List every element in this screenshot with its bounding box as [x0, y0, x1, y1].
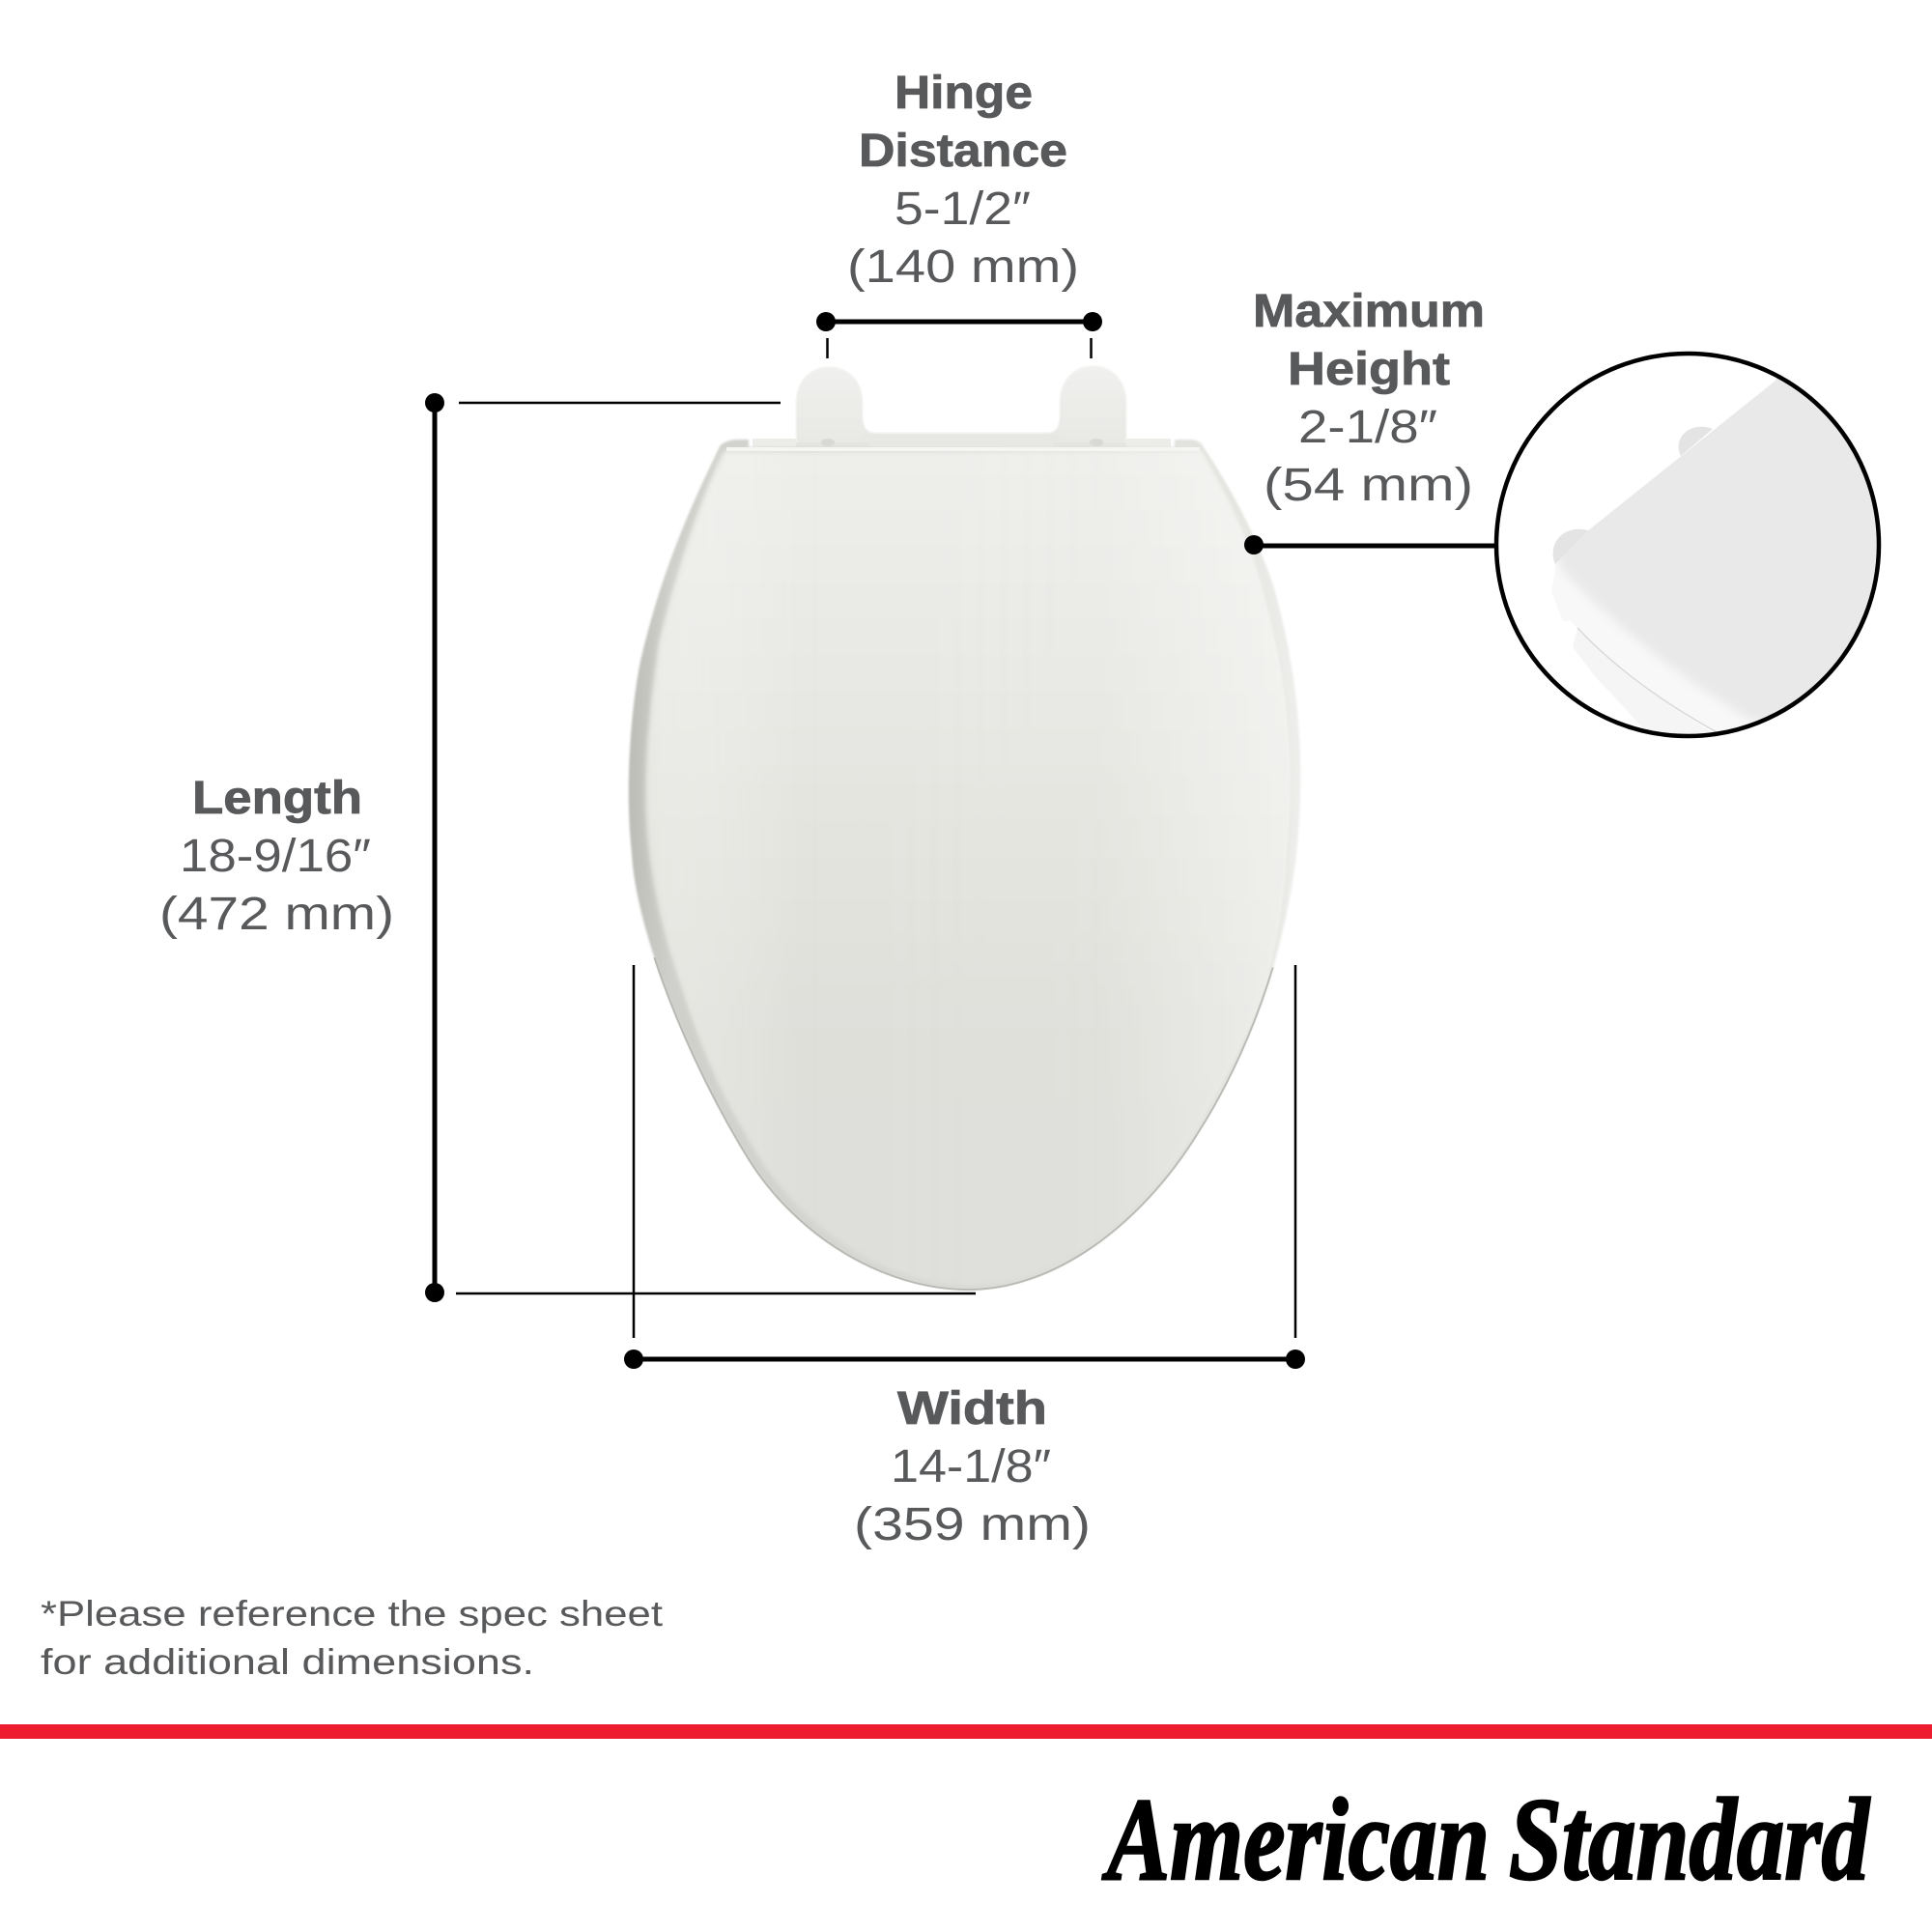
inset: side profile circle — [1493, 352, 1882, 738]
label: Length: (472 mm) — [159, 889, 394, 940]
seat rim — [629, 440, 1300, 1290]
label: Hinge Distance: 5-1/2″ — [895, 184, 1031, 235]
footnote — [41, 1594, 664, 1682]
footnote: for additional dimensions. — [41, 1642, 534, 1682]
label: Hinge Distance: (140 mm) — [847, 242, 1079, 293]
label: Hinge Distance — [847, 68, 1079, 293]
label: Maximum Height: 2-1/8″ — [1298, 402, 1437, 453]
label: Maximum Height: (54 mm) — [1264, 460, 1473, 511]
label: Hinge Distance: Distance — [859, 126, 1067, 177]
label: Width — [854, 1383, 1091, 1550]
label: Hinge Distance: Hinge — [895, 68, 1033, 119]
label: Length: Length — [192, 773, 362, 824]
lid sheen — [645, 451, 1291, 1286]
footnote: *Please reference the spec sheet — [41, 1594, 664, 1634]
label: Maximum Height: Maximum — [1253, 286, 1485, 337]
label: Maximum Height — [1253, 286, 1485, 511]
label: Length — [159, 773, 394, 940]
American Standard logo: American — [1101, 1775, 1490, 1905]
length dimension line — [425, 393, 976, 1302]
seat lower edge line — [632, 854, 1296, 1290]
width dimension line — [624, 965, 1305, 1369]
label: Maximum Height: Height — [1288, 344, 1450, 395]
label: Width: Width — [897, 1383, 1047, 1435]
maximum height leader line — [1244, 535, 1496, 554]
hinge posts — [753, 366, 1171, 447]
red divider bar — [0, 1724, 1932, 1739]
label: Length: 18-9/16″ — [180, 831, 371, 882]
seat lid face — [645, 451, 1291, 1286]
toilet seat product image — [629, 366, 1300, 1290]
hinge distance dimension line — [816, 312, 1102, 358]
American Standard logo — [1101, 1775, 1871, 1905]
label: Width: 14-1/8″ — [891, 1441, 1051, 1492]
label: Width: (359 mm) — [854, 1499, 1091, 1550]
